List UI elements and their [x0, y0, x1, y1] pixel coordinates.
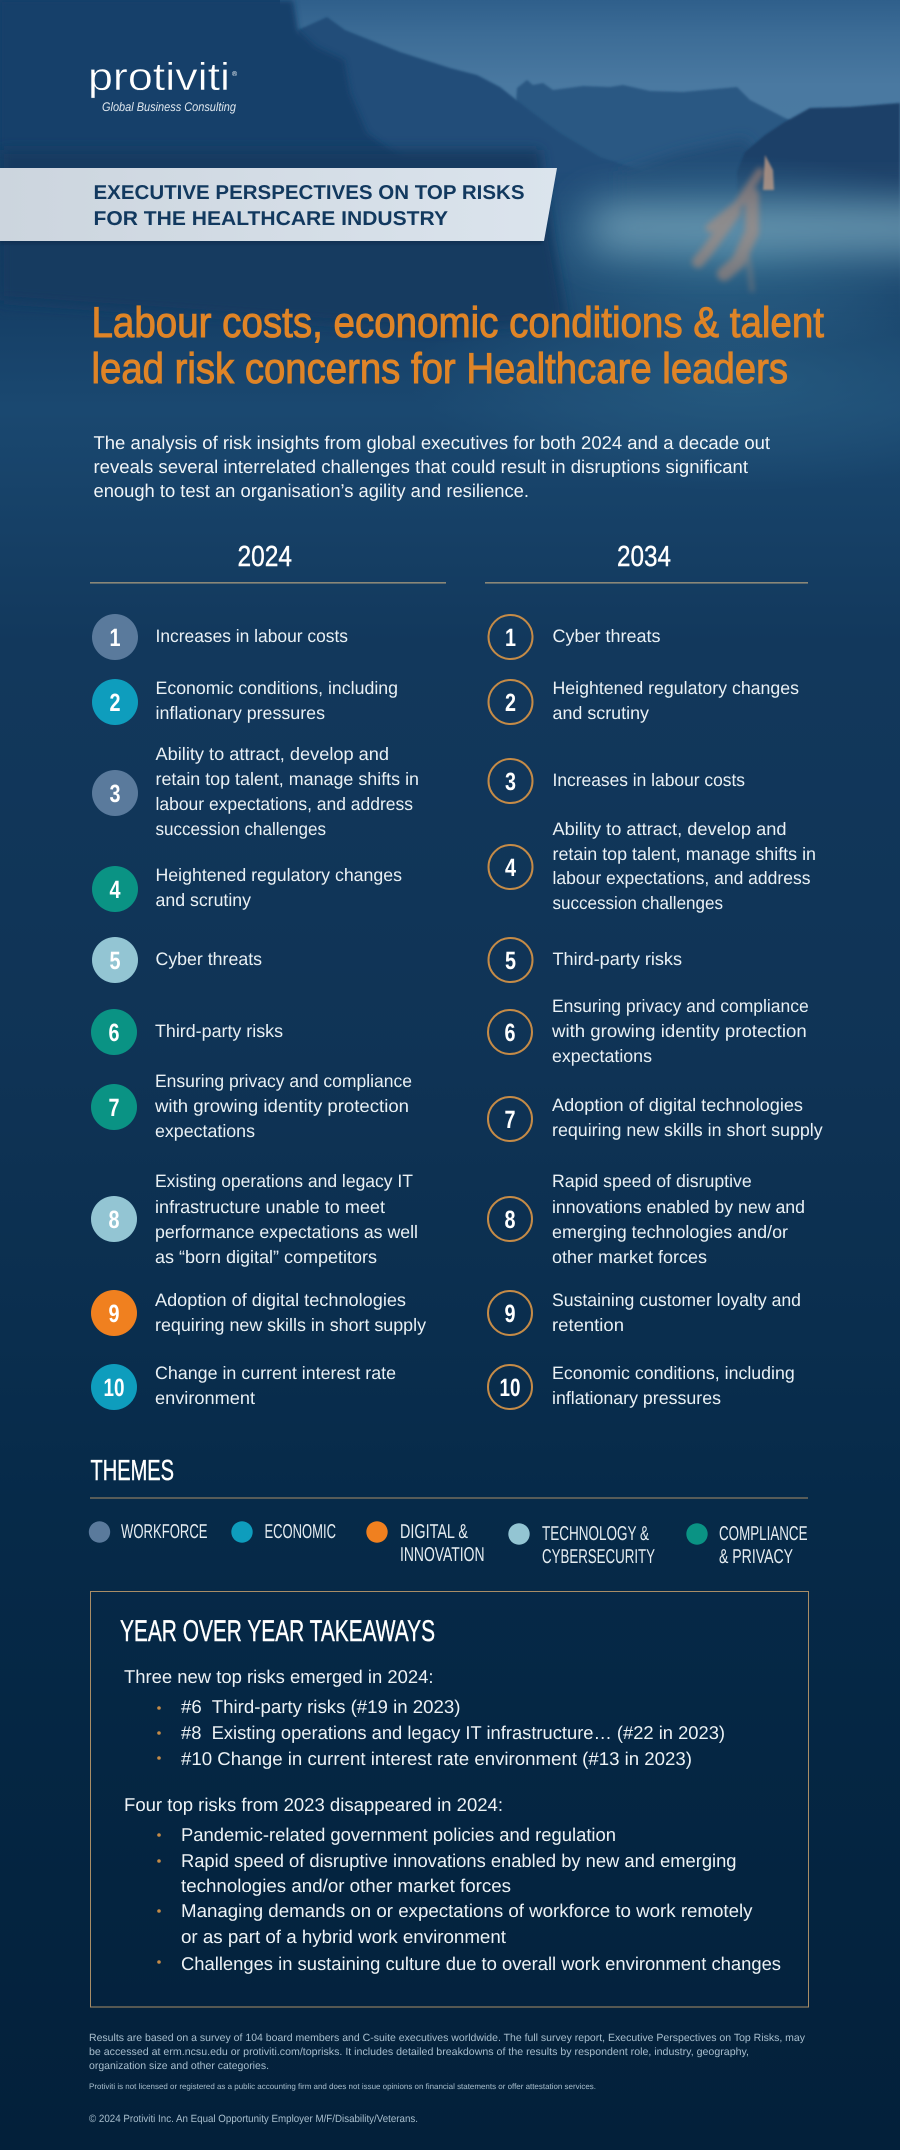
- heading: 2034: 2034: [617, 541, 671, 573]
- risk 6: expectations: [552, 1046, 652, 1066]
- risk 2: inflationary pressures: [156, 703, 325, 723]
- risk 2: and scrutiny: [552, 703, 649, 723]
- risk 6: Ensuring privacy and compliance: [552, 996, 809, 1016]
- footnote: survey methodology: [89, 2032, 806, 2072]
- legend: technology and cybersecurity: TECHNOLOGY &: [542, 1523, 649, 1545]
- risk 9: [488, 1290, 801, 1335]
- intro paragraph: [94, 432, 770, 501]
- legend: technology and cybersecurity: [508, 1523, 655, 1568]
- risk 4: [488, 819, 816, 913]
- list: new top risks: [124, 1666, 725, 1769]
- list: disappeared risks: Managing demands on or expectations of workforce to work remotely: [181, 1900, 753, 1921]
- risk 3: [488, 759, 745, 803]
- risk 8: infrastructure unable to meet: [155, 1197, 385, 1217]
- legend: compliance and privacy: [686, 1523, 808, 1568]
- footnote: survey methodology: be accessed at erm.ncsu.edu or protiviti.com/toprisks. It includes detailed breakdowns of the results by respondent role, industry, geography,: [89, 2046, 749, 2058]
- intro paragraph: enough to test an organisation’s agility and resilience.: [94, 480, 529, 501]
- risk 1: Cyber threats: [552, 626, 660, 646]
- risk 4: retain top talent, manage shifts in: [552, 844, 816, 864]
- panel: 2024 ranking: [90, 541, 446, 1410]
- legend: digital and innovation: DIGITAL &: [400, 1521, 468, 1543]
- list: disappeared risks: Four top risks from 2023 disappeared in 2024:: [124, 1794, 503, 1815]
- risk 1: 1: [505, 624, 516, 652]
- title: [92, 299, 824, 393]
- risk 6: [488, 996, 809, 1066]
- legend: economic: [231, 1521, 336, 1543]
- risk 4: Heightened regulatory changes: [156, 865, 402, 885]
- risk 7: 7: [504, 1106, 516, 1134]
- risk 8: 8: [504, 1206, 516, 1234]
- risk 9: [91, 1290, 426, 1336]
- risk 1: [92, 614, 348, 660]
- risk 2: Heightened regulatory changes: [552, 678, 799, 698]
- risk 9: retention: [552, 1315, 624, 1335]
- legend: economic: ECONOMIC: [264, 1521, 336, 1543]
- risk 7: requiring new skills in short supply: [552, 1120, 823, 1140]
- risk 8: other market forces: [552, 1247, 707, 1267]
- risk 5: Cyber threats: [156, 949, 262, 969]
- risk 8: [91, 1171, 418, 1267]
- risk 4: Ability to attract, develop and: [552, 819, 786, 839]
- risk 8: as “born digital” competitors: [155, 1247, 377, 1267]
- risk 10: Change in current interest rate: [155, 1363, 396, 1383]
- risk 2: [92, 678, 398, 725]
- risk 7: expectations: [155, 1121, 255, 1141]
- footnote: survey methodology: Results are based on a survey of 104 board members and C-suite executives worldwide. The full survey report, Executive Perspectives on Top Risks, may: [89, 2032, 806, 2044]
- list: disappeared risks: [124, 1794, 781, 1974]
- risk 6: [91, 1009, 283, 1055]
- list: disappeared risks: technologies and/or other market forces: [181, 1875, 511, 1896]
- risk 5: [92, 937, 262, 983]
- risk 2: 2: [505, 689, 516, 717]
- legend: workforce: [89, 1521, 208, 1543]
- risk 7: with growing identity protection: [154, 1096, 409, 1116]
- legend: digital and innovation: INNOVATION: [400, 1544, 484, 1566]
- risk 4: labour expectations, and address: [552, 868, 810, 888]
- risk 5: [488, 938, 682, 982]
- risk 10: inflationary pressures: [552, 1388, 721, 1408]
- risk 9: Sustaining customer loyalty and: [552, 1290, 801, 1310]
- panel: year over year takeaways: [90, 1592, 808, 2007]
- heading: themes: THEMES: [90, 1455, 174, 1487]
- panel: 2034 ranking: [485, 541, 823, 1409]
- risk 9: Adoption of digital technologies: [155, 1290, 406, 1310]
- risk 10: 10: [104, 1374, 124, 1402]
- risk 10: [91, 1363, 396, 1410]
- intro paragraph: The analysis of risk insights from global executives for both 2024 and a decade out: [94, 432, 770, 453]
- risk 9: 9: [504, 1300, 516, 1328]
- risk 7: [91, 1071, 412, 1141]
- risk 3: succession challenges: [156, 819, 326, 839]
- title: lead risk concerns for Healthcare leaders: [92, 345, 788, 393]
- risk 4: [92, 865, 402, 912]
- risk 7: [488, 1095, 823, 1141]
- risk 6: Third-party risks: [155, 1021, 283, 1041]
- risk 5: 5: [505, 947, 516, 975]
- risk 4: and scrutiny: [156, 890, 251, 910]
- intro paragraph: reveals several interrelated challenges that could result in disruptions significant: [94, 456, 748, 477]
- risk 3: Increases in labour costs: [552, 770, 745, 790]
- list: new top risks: #8 Existing operations and legacy IT infrastructure… (#22 in 2023): [181, 1722, 725, 1743]
- legend: workforce: WORKFORCE: [121, 1521, 208, 1543]
- title: Labour costs, economic conditions & talent: [92, 299, 824, 347]
- logo: protiviti: ®: [232, 71, 238, 78]
- risk 3: Ability to attract, develop and: [156, 744, 389, 764]
- risk 3: retain top talent, manage shifts in: [156, 769, 419, 789]
- heading: takeaways: YEAR OVER YEAR TAKEAWAYS: [120, 1615, 435, 1648]
- footnote: copyright: © 2024 Protiviti Inc. An Equal Opportunity Employer M/F/Disability/Veterans.: [89, 2113, 418, 2125]
- banner: [0, 168, 557, 244]
- risk 6: with growing identity protection: [551, 1021, 807, 1041]
- risk 2: 2: [110, 689, 120, 717]
- risk 8: innovations enabled by new and: [552, 1197, 805, 1217]
- list: new top risks: #10 Change in current interest rate environment (#13 in 2023): [181, 1748, 692, 1769]
- list: new top risks: #6 Third-party risks (#19 in 2023): [181, 1696, 461, 1717]
- panel: themes legend: [89, 1455, 808, 1568]
- risk 4: 4: [110, 876, 121, 904]
- risk 4: succession challenges: [552, 893, 723, 913]
- logo: protiviti: protiviti: [88, 56, 230, 99]
- list: disappeared risks: Pandemic-related government policies and regulation: [181, 1824, 616, 1845]
- risk 1: 1: [110, 624, 121, 652]
- risk 2: [488, 678, 799, 724]
- risk 10: 10: [500, 1374, 520, 1402]
- risk 10: Economic conditions, including: [552, 1363, 795, 1383]
- risk 10: environment: [155, 1388, 255, 1408]
- logo: protiviti: [88, 56, 238, 114]
- risk 1: Increases in labour costs: [156, 626, 348, 646]
- banner: FOR THE HEALTHCARE INDUSTRY: [94, 208, 449, 230]
- footnote: survey methodology: organization size and other categories.: [89, 2060, 269, 2072]
- logo: protiviti: Global Business Consulting: [102, 100, 236, 114]
- risk 10: [488, 1363, 795, 1409]
- risk 8: performance expectations as well: [155, 1222, 418, 1242]
- risk 8: Existing operations and legacy IT: [155, 1171, 413, 1191]
- risk 3: [92, 744, 419, 839]
- risk 2: Economic conditions, including: [156, 678, 398, 698]
- risk 6: 6: [504, 1019, 516, 1047]
- risk 6: 6: [108, 1019, 120, 1047]
- risk 1: [488, 615, 660, 659]
- risk 8: 8: [108, 1206, 120, 1234]
- risk 7: Ensuring privacy and compliance: [155, 1071, 412, 1091]
- risk 8: emerging technologies and/or: [552, 1222, 788, 1242]
- risk 5: 5: [110, 947, 121, 975]
- risk 8: Rapid speed of disruptive: [552, 1171, 752, 1191]
- risk 9: requiring new skills in short supply: [155, 1315, 426, 1335]
- risk 7: Adoption of digital technologies: [552, 1095, 803, 1115]
- footnote: disclaimer: Protiviti is not licensed or registered as a public accounting firm and does not issue opinions on financial statements or offer attestation services.: [89, 2082, 596, 2091]
- risk 8: [488, 1171, 805, 1267]
- legend: digital and innovation: [366, 1521, 484, 1566]
- risk 3: 3: [110, 780, 120, 808]
- legend: compliance and privacy: COMPLIANCE: [719, 1523, 808, 1545]
- list: disappeared risks: or as part of a hybrid work environment: [181, 1926, 506, 1947]
- heading: 2024: 2024: [238, 541, 292, 573]
- legend: technology and cybersecurity: CYBERSECURITY: [542, 1546, 655, 1568]
- banner: EXECUTIVE PERSPECTIVES ON TOP RISKS: [94, 182, 524, 204]
- list: disappeared risks: Rapid speed of disruptive innovations enabled by new and emerging: [181, 1850, 736, 1871]
- risk 4: 4: [505, 854, 516, 882]
- risk 5: Third-party risks: [552, 949, 682, 969]
- risk 9: 9: [108, 1300, 120, 1328]
- list: new top risks: Three new top risks emerged in 2024:: [124, 1666, 434, 1687]
- risk 3: 3: [505, 768, 516, 796]
- risk 7: 7: [108, 1094, 120, 1122]
- legend: compliance and privacy: & PRIVACY: [719, 1546, 793, 1568]
- list: disappeared risks: Challenges in sustaining culture due to overall work environment changes: [181, 1953, 781, 1974]
- risk 3: labour expectations, and address: [156, 794, 413, 814]
